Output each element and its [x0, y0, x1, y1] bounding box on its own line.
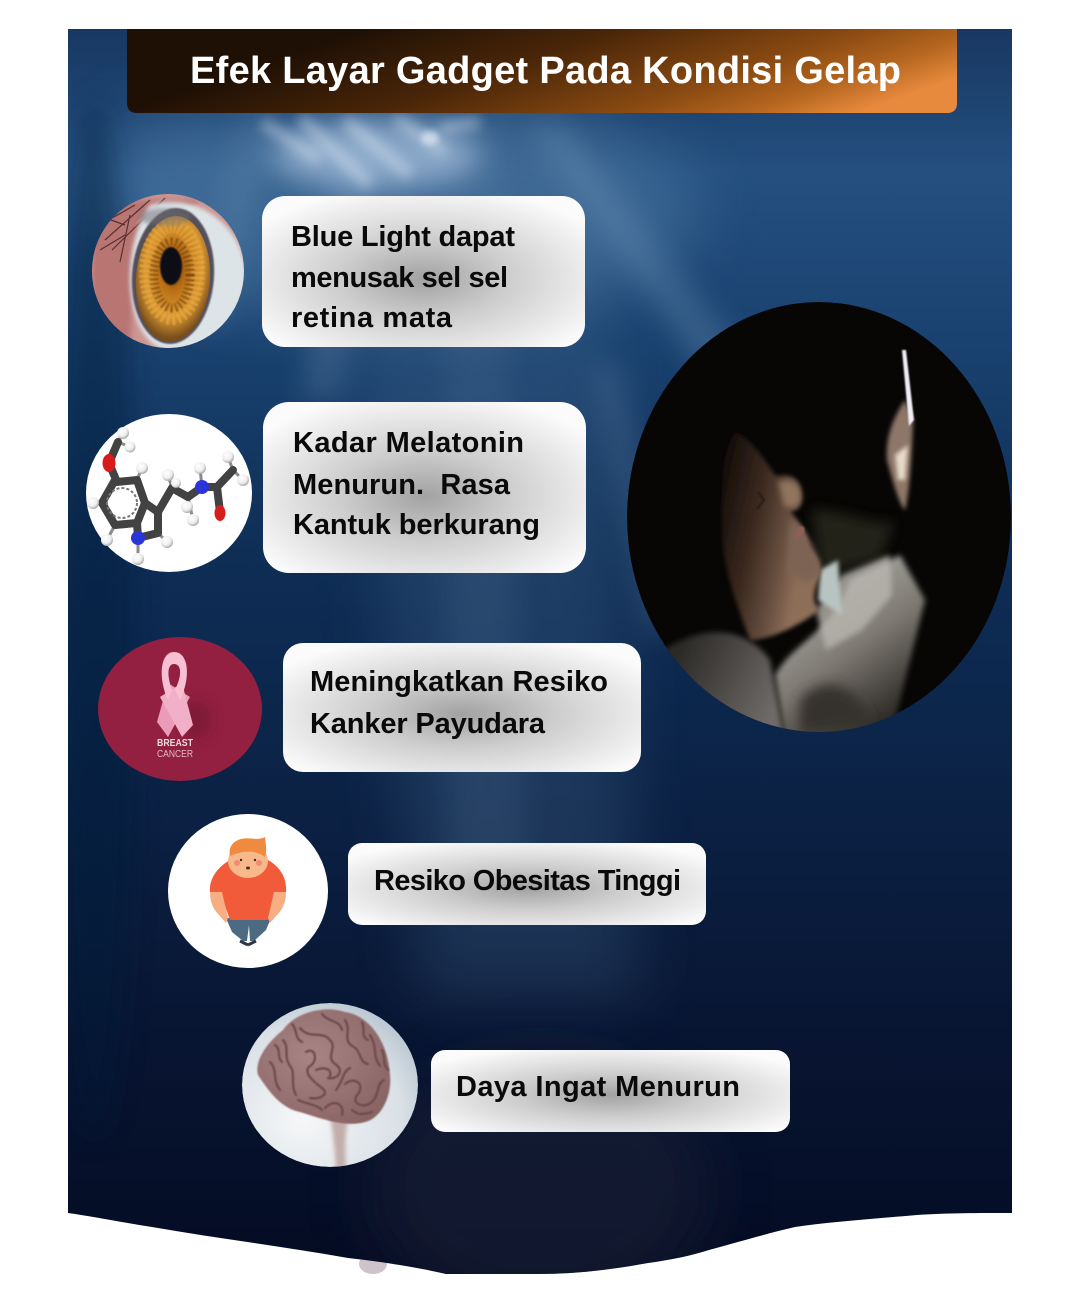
- icon: breast cancer ribbon: BREAST: [157, 737, 193, 749]
- title banner: [127, 29, 957, 113]
- bubble: breast cancer: Meningkatkan Resiko: [310, 666, 608, 698]
- icon: eye: [90, 192, 246, 352]
- icon: melatonin molecule: [86, 414, 252, 572]
- bubble: melatonin: Menurun. Rasa: [293, 469, 511, 501]
- icon: breast cancer ribbon: [98, 637, 262, 781]
- bubble: breast cancer: Kanker Payudara: [310, 708, 546, 740]
- bubble: melatonin: Kadar Melatonin: [293, 427, 524, 459]
- title text: Efek Layar Gadget Pada Kondisi Gelap: [190, 50, 901, 92]
- bubble: blue light: [262, 196, 585, 347]
- bubble: melatonin: Kantuk berkurang: [293, 509, 540, 541]
- bubble: melatonin: [263, 402, 586, 573]
- woman using phone in the dark: [627, 302, 1011, 740]
- icon: breast cancer ribbon: CANCER: [157, 748, 193, 760]
- bubble: blue light: menusak sel sel: [291, 262, 508, 294]
- bubble: obesity: Resiko Obesitas Tinggi: [374, 865, 681, 897]
- bubble: blue light: Blue Light dapat: [291, 221, 515, 253]
- icon: brain: [242, 1003, 418, 1170]
- bubble: memory: [431, 1050, 790, 1132]
- bubble: obesity: [348, 843, 706, 925]
- pink blob under the banner edge: [359, 1254, 387, 1274]
- bubble: memory: Daya Ingat Menurun: [456, 1071, 740, 1103]
- bubble: blue light: retina mata: [291, 302, 453, 334]
- bubble: breast cancer: [283, 643, 641, 772]
- icon: obesity character: [168, 814, 328, 968]
